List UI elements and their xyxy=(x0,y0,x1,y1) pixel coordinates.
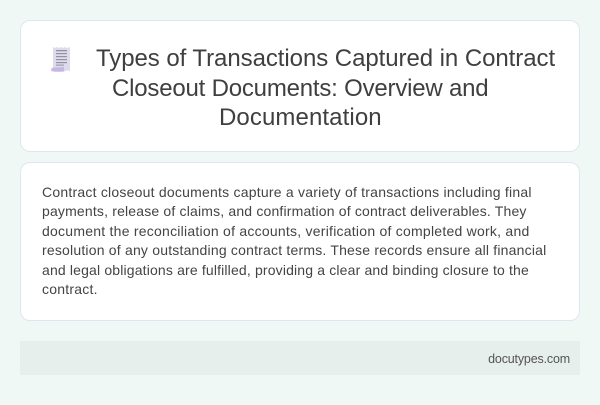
footer source text: docutypes.com xyxy=(488,352,570,366)
description text: document the reconciliation of accounts, verification of completed work, and xyxy=(42,223,530,239)
panel: description card: contract. xyxy=(42,281,98,297)
description text: payments, release of claims, and confirmation of contract deliverables. They xyxy=(42,203,527,219)
description text: resolution of any outstanding contract terms. These records ensure all financial xyxy=(42,242,546,258)
description text xyxy=(42,184,546,297)
description text: Contract closeout documents capture a variety of transactions including final xyxy=(42,184,532,200)
panel: title card xyxy=(20,20,580,152)
panel: description card xyxy=(20,162,580,321)
title: Closeout Documents: Overview and xyxy=(112,75,488,102)
description text: and legal obligations are fulfilled, providing a clear and binding closure to the xyxy=(42,262,529,278)
title: Documentation xyxy=(219,104,382,131)
title: Types of Transactions Captured in Contract xyxy=(96,45,555,72)
icon: document receipt xyxy=(51,47,70,72)
title xyxy=(96,45,555,131)
footer bar xyxy=(20,341,580,375)
